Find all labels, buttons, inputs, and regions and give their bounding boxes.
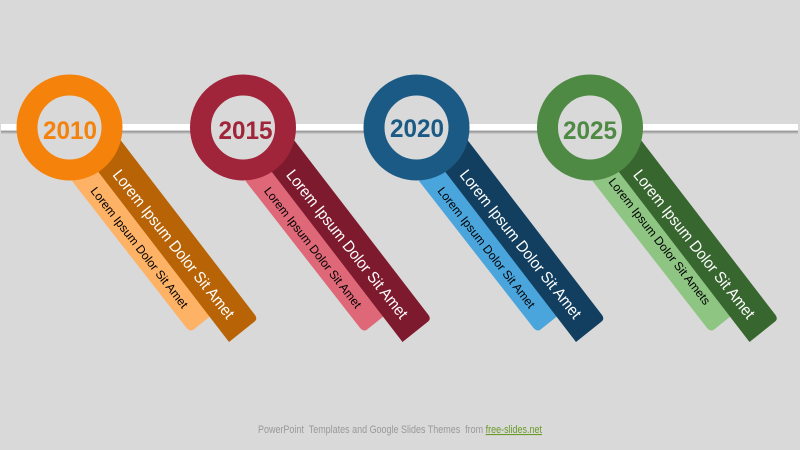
dark ribbon text 2025: Lorem Ipsum Dolor Sit Amet bbox=[629, 167, 758, 323]
light ribbon 2020 bbox=[419, 160, 565, 330]
year 2020: 2020 bbox=[390, 115, 444, 143]
dark ribbon text 2020: Lorem Ipsum Dolor Sit Amet bbox=[456, 167, 584, 323]
light ribbon text 2015: Lorem Ipsum Dolor Sit Amet bbox=[261, 184, 365, 312]
dark ribbon 2010 bbox=[83, 129, 256, 342]
dark ribbon 2015 bbox=[256, 129, 430, 342]
year 2025: 2025 bbox=[563, 117, 617, 145]
light ribbon text 2020: Lorem Ipsum Dolor Sit Amet bbox=[435, 184, 538, 312]
light ribbon 2025 bbox=[592, 160, 738, 330]
light ribbon text 2025: Lorem Ipsum Dolor Sit Amets bbox=[606, 175, 713, 308]
timeline bar bbox=[1, 124, 798, 134]
dark ribbon text 2015: Lorem Ipsum Dolor Sit Amet bbox=[282, 167, 411, 323]
year 2010: 2010 bbox=[43, 117, 97, 145]
milestone 2020 bbox=[374, 85, 603, 342]
milestone 2010 bbox=[27, 85, 256, 342]
ring 2020 bbox=[374, 85, 459, 170]
ring 2025 bbox=[548, 85, 632, 170]
milestone 2025 bbox=[548, 85, 777, 342]
footer credit: PowerPoint Templates and Google Slides Themes from free-slides.net bbox=[258, 424, 542, 436]
year 2015: 2015 bbox=[218, 117, 273, 145]
dark ribbon 2025 bbox=[604, 129, 777, 342]
light ribbon 2010 bbox=[72, 160, 218, 330]
dark ribbon text 2010: Lorem Ipsum Dolor Sit Amet bbox=[109, 167, 237, 323]
ring 2010 bbox=[27, 85, 112, 170]
light ribbon 2015 bbox=[246, 160, 392, 330]
light ribbon text 2010: Lorem Ipsum Dolor Sit Amet bbox=[88, 184, 191, 312]
dark ribbon 2020 bbox=[430, 129, 603, 342]
milestone 2015 bbox=[200, 85, 430, 342]
ring 2015 bbox=[200, 85, 286, 170]
